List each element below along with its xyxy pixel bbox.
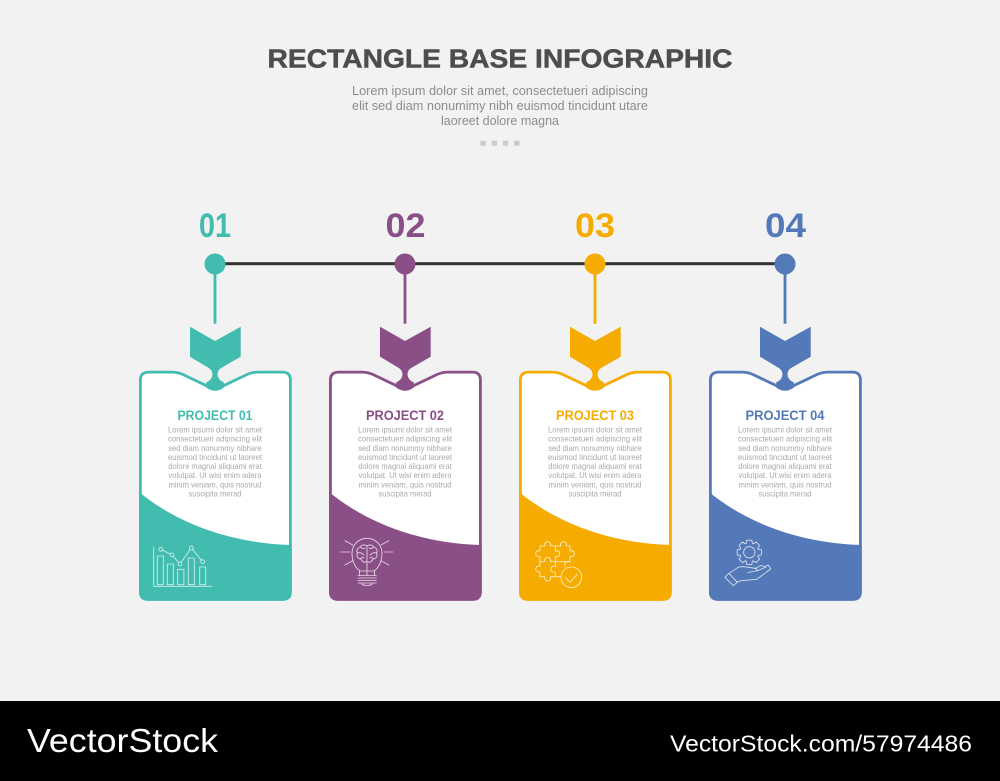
body text 02: euismod tincidunt ut laoreet bbox=[358, 452, 453, 462]
body text 02: Lorem ipsumi dolor sit amet bbox=[358, 424, 453, 434]
step 02 bbox=[329, 207, 482, 601]
body text 04: volutpat. Ut wisi enim adera bbox=[738, 470, 832, 480]
icon: bar and line chart bbox=[154, 546, 212, 586]
icon: puzzle with check mark bbox=[536, 542, 582, 588]
card 04 bbox=[709, 327, 862, 601]
icon: light bulb with brain bbox=[341, 538, 393, 585]
timeline line bbox=[215, 262, 785, 265]
body text 02: consectetueri adipiscing elit bbox=[358, 434, 453, 444]
connector stem 03 bbox=[594, 264, 596, 324]
subtitle text bbox=[352, 84, 648, 128]
body text 03 bbox=[548, 424, 643, 498]
body text 02: sed diam nonummy nibhare bbox=[358, 443, 452, 453]
body text 03: sed diam nonummy nibhare bbox=[548, 443, 642, 453]
body text 04: Lorem ipsumi dolor sit amet bbox=[738, 424, 833, 434]
heading 03: PROJECT 03 bbox=[556, 408, 634, 423]
body text 01: suscipita merad bbox=[188, 488, 242, 498]
number 03: 03 bbox=[575, 207, 615, 245]
body text 01: Lorem ipsumi dolor sit amet bbox=[168, 424, 263, 434]
body text 04: consectetueri adipiscing elit bbox=[738, 434, 833, 444]
body text 01: dolore magnai aliquami erat bbox=[168, 461, 262, 471]
subtitle text: laoreet dolore magna bbox=[441, 114, 559, 128]
footer bar bbox=[0, 701, 1000, 781]
body text 03: dolore magnai aliquami erat bbox=[548, 461, 642, 471]
body text 01: sed diam nonummy nibhare bbox=[168, 443, 262, 453]
footer image id text: VectorStock.com/57974486 bbox=[670, 730, 972, 756]
subtitle text: Lorem ipsum dolor sit amet, consectetueri adipiscing bbox=[352, 84, 648, 98]
connector stem 01 bbox=[214, 264, 216, 324]
icon: hand holding gear bbox=[725, 540, 771, 586]
body text 01 bbox=[168, 424, 263, 498]
body text 04: minim veniam, quis nostrud bbox=[738, 479, 832, 489]
body text 04: euismod tincidunt ut laoreet bbox=[738, 452, 833, 462]
body text 02: suscipita merad bbox=[378, 488, 432, 498]
body text 03: Lorem ipsumi dolor sit amet bbox=[548, 424, 643, 434]
body text 01: volutpat. Ut wisi enim adera bbox=[168, 470, 262, 480]
number 01: 01 bbox=[199, 207, 231, 245]
body text 04: suscipita merad bbox=[758, 488, 812, 498]
title: RECTANGLE BASE INFOGRAPHIC bbox=[268, 44, 733, 74]
card 03 bbox=[519, 327, 672, 601]
body text 01: consectetueri adipiscing elit bbox=[168, 434, 263, 444]
arrow connector 03 bbox=[570, 327, 621, 390]
body text 03: minim veniam, quis nostrud bbox=[548, 479, 642, 489]
step 04 bbox=[709, 207, 862, 601]
body text 04: sed diam nonummy nibhare bbox=[738, 443, 832, 453]
heading 01: PROJECT 01 bbox=[178, 408, 253, 423]
body text 04 bbox=[738, 424, 833, 498]
body text 03: consectetueri adipiscing elit bbox=[548, 434, 643, 444]
number 02: 02 bbox=[386, 207, 426, 245]
body text 01: euismod tincidunt ut laoreet bbox=[168, 452, 263, 462]
body text 01: minim veniam, quis nostrud bbox=[168, 479, 262, 489]
footer logo text: VectorStock bbox=[27, 722, 219, 759]
arrow connector 04 bbox=[760, 327, 811, 390]
body text 02: volutpat. Ut wisi enim adera bbox=[358, 470, 452, 480]
body text 03: volutpat. Ut wisi enim adera bbox=[548, 470, 642, 480]
card 01 bbox=[139, 327, 292, 601]
heading 04: PROJECT 04 bbox=[746, 408, 825, 423]
connector stem 04 bbox=[784, 264, 786, 324]
subtitle text: elit sed diam nonumimy nibh euismod tincidunt utare bbox=[352, 99, 648, 113]
body text 02: minim veniam, quis nostrud bbox=[358, 479, 452, 489]
body text 03: euismod tincidunt ut laoreet bbox=[548, 452, 643, 462]
body text 03: suscipita merad bbox=[568, 488, 622, 498]
heading 02: PROJECT 02 bbox=[366, 408, 444, 423]
step 03 bbox=[519, 207, 672, 601]
timeline node 03 bbox=[584, 254, 606, 274]
connector stem 02 bbox=[404, 264, 406, 324]
body text 02 bbox=[358, 424, 453, 498]
pagination dots bbox=[480, 141, 520, 146]
arrow connector 02 bbox=[380, 327, 431, 390]
body text 02: dolore magnai aliquami erat bbox=[358, 461, 452, 471]
number 04: 04 bbox=[765, 207, 806, 245]
arrow connector 01 bbox=[190, 327, 241, 390]
timeline node 02 bbox=[394, 254, 416, 274]
timeline node 01 bbox=[204, 254, 226, 274]
card 02 bbox=[329, 327, 482, 601]
step 01 bbox=[139, 207, 292, 601]
body text 04: dolore magnai aliquami erat bbox=[738, 461, 832, 471]
timeline node 04 bbox=[774, 254, 796, 274]
